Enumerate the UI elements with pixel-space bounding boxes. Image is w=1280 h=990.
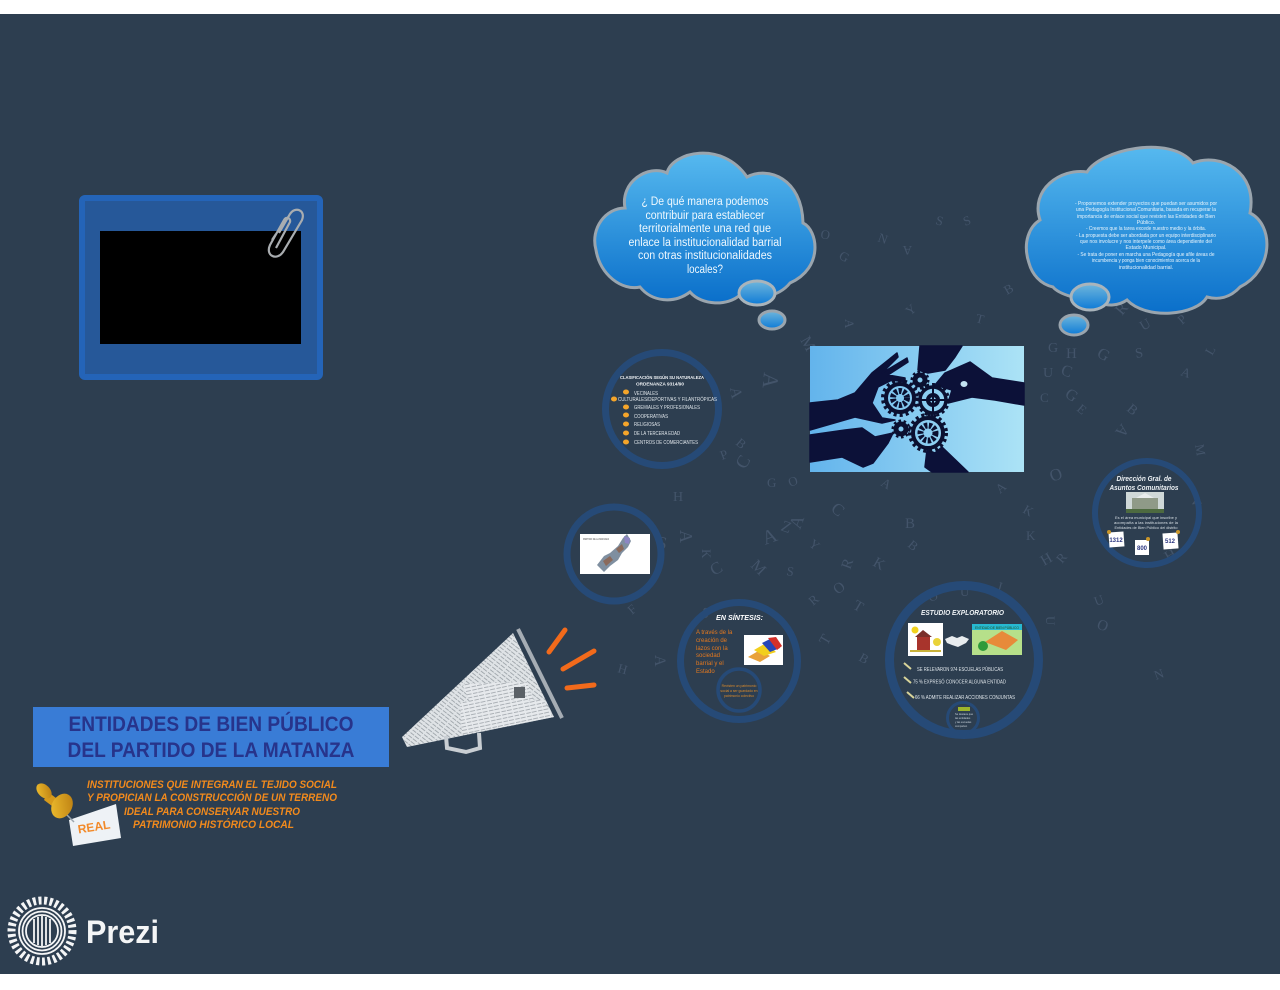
megaphone handle [446,733,480,752]
neighbourhood drawing [972,624,1022,655]
community text: acompaña a las instituciones de la [1114,521,1179,525]
question text: territorialmente una red que [639,223,771,235]
synthesis text: sociedad [696,653,720,659]
gear 3 [910,415,946,451]
gears [883,372,948,451]
scattered background letters: H [1066,346,1077,362]
thought bubble large [1071,284,1109,310]
synthesis text: Estado [696,669,715,675]
scattered background letters: B [856,650,872,667]
gear 5 [893,421,909,437]
classification list: VECINALES [634,391,659,397]
classification list: COOPERATIVAS [634,414,669,420]
logo mark [12,900,72,962]
inner circle [948,702,978,734]
tiny note text: comparten [955,724,968,728]
megaphone folded sheet [462,682,533,702]
subtitle: PATRIMONIO HISTÓRICO LOCAL [133,818,294,831]
scattered background letters: A [1179,364,1194,381]
prezi logo [12,900,159,962]
megaphone dark photo [514,687,525,698]
proposals text [1075,201,1217,271]
scattered background letters: O [926,588,940,605]
community text: Entidades de Bien Público del distrito [1114,526,1178,530]
scattered background letters: K [1020,502,1037,520]
synthesis text: A través de la [696,630,733,636]
scattered background letters: Y [902,300,920,318]
scattered background letters: U [1043,616,1058,626]
question text: con otras institucionalidades [638,250,772,262]
study findings: SE RELEVARON 974 ESCUELAS PÚBLICAS [917,666,1004,673]
megaphone lower sheet [460,700,554,735]
proposals text: - Se trata de poner en marcha una Pedagogía que afile áreas de [1078,252,1215,258]
proposals text: - La propuesta debe ser abordada por un equipo interdisciplinario [1076,233,1216,239]
scattered background letters: P [1174,311,1189,327]
neighbourhood drawing: ENTIDAD DE BIEN PÚBLICO [975,626,1019,630]
classification list: CENTROS DE COMERCIANTES [634,440,699,446]
scattered background letters: A [1111,420,1132,441]
scattered background letters: F [624,601,639,617]
map image [580,534,650,574]
scattered background letters: C [1040,390,1049,405]
scattered background letters: N [1152,665,1166,683]
scattered background letters: J [995,578,1004,594]
question text: contribuir para establecer [646,210,765,222]
tiny note text: las entidades [955,716,971,720]
community heading [1109,476,1179,492]
thought bubble large [739,281,775,305]
map caption: PARTIDO DE LA MATANZA [583,537,609,541]
proposals text: - Creemos que la tarea excede nuestro medio y la órbita. [1086,226,1206,232]
scattered background letters: R [1112,299,1132,319]
scattered background letters: R [839,556,857,571]
classification list: DE LA TERCERA EDAD [634,431,680,437]
scattered background letters: G [1094,345,1113,365]
proposals text: institucionalidad barrial. [1119,265,1173,271]
scattered background letters: R [1053,549,1070,566]
classification list: CULTURALES/DEPORTIVAS Y FILANTRÓPICAS [618,396,718,403]
gear 2 [918,384,948,416]
title text [68,712,354,762]
classification list: GREMIALES Y PROFESIONALES [634,405,701,411]
scattered background letters: A [676,530,696,543]
icon: newspaper megaphone [402,629,562,752]
cloud: proposals [1026,147,1267,335]
tiny note text [955,712,974,728]
note label: REAL [77,818,111,836]
scattered background letters: T [850,598,866,616]
scattered background letters: S [785,563,795,579]
study findings: 66 % ADMITE REALIZAR ACCIONES CONJUNTAS [915,695,1016,701]
finding markers [904,663,914,698]
question text: ¿ De qué manera podemos [642,196,769,208]
proposals text: - Proponemos extender proyectos que puedan ser asumidos por [1075,201,1217,207]
scattered background letters: K [870,555,888,574]
scattered background letters: M [797,334,818,354]
sound rays [549,630,594,688]
question text: enlace la institucionalidad barrial [628,237,782,249]
video placeholder [100,231,301,344]
scattered background letters: H [616,660,629,677]
title banner [33,707,389,767]
study findings: 75 % EXPRESÓ CONOCER ALGUNA ENTIDAD [913,678,1006,686]
study heading: ESTUDIO EXPLORATORIO [921,608,1004,617]
puzzle pieces [748,637,782,662]
circle: exploratory study [890,586,1038,734]
scattered background letters: P [718,446,730,463]
synthesis text: lazos con la [696,646,728,652]
scattered background letters: U [1043,366,1053,381]
panel: video frame [82,198,320,377]
small orange text: social a ser guardado en [720,689,758,693]
scattered background letters: E [1074,401,1090,417]
scattered background letters: B [905,516,915,532]
gear 4 [912,372,928,388]
scattered background letters: H [1038,550,1056,569]
scattered background letters: U [1092,591,1106,609]
synthesis text [696,630,733,675]
scattered background letters: B [1123,402,1140,419]
circle: synthesis [680,602,798,720]
synthesis text: barrial y el [696,661,724,667]
scattered background letters: A [785,512,808,531]
community text [1114,516,1179,530]
scattered background letters: M [1192,443,1209,457]
icon: paperclip [269,210,303,257]
hole in hand [960,381,968,387]
note pins [1107,530,1180,541]
scattered background letters: Y [806,536,823,554]
study findings [913,666,1016,701]
classification title: ORDENANZA 9314/90 [636,382,684,386]
community heading: Asuntos Comunitarios [1109,485,1179,492]
scattered background letters: A [842,319,857,329]
scattered background letters: S [1134,346,1144,362]
scattered background letters: A [758,372,784,390]
note 1312: 1312 [1109,538,1123,544]
scattered background letters: H [1162,546,1180,565]
scattered background letters: A [651,655,668,667]
scattered background letters: M [747,557,769,579]
title text: DEL PARTIDO DE LA MATANZA [68,739,354,762]
scattered background letters: T [817,632,835,648]
scattered background letters: O [786,473,800,490]
proposals text: Estado Municipal. [1126,245,1166,251]
scattered background letters: G [1062,385,1081,406]
classification title [620,373,705,386]
scattered background letters: R [805,591,822,608]
scattered background letters: N [876,230,891,247]
scattered background letters: K [1026,528,1036,543]
scattered background letters: O [1095,617,1110,636]
scattered background letters: S [934,212,945,229]
thought bubble small [1060,315,1088,335]
note: real with pin [33,780,121,846]
subtitle: IDEAL PARA CONSERVAR NUESTRO [124,806,300,818]
scattered background letters: A [902,243,912,258]
megaphone rim [518,629,562,718]
inner circle [718,669,760,711]
community text: Es el área municipal que inscribe y [1115,516,1177,520]
scattered background letters: O [830,579,849,598]
classification list: RELIGIOSAS [634,422,661,428]
subtitle: INSTITUCIONES QUE INTEGRAN EL TEJIDO SOCIAL [87,779,337,791]
scattered background letters: B [733,435,750,452]
scattered background letters: A [878,475,895,493]
classification title: CLASIFICACIÓN SEGÚN SU NATURALEZA [620,373,705,380]
small orange text [720,684,758,698]
proposals text: incumbencia y ponga bien conocimientos acerca de la [1092,258,1200,264]
question text: locales? [687,264,723,276]
small orange text: patrimonio colectivo [724,694,754,698]
scattered background letters: S [655,532,669,554]
scattered background letters: S [961,212,973,229]
green note [958,707,970,711]
scattered background letters: A [726,386,745,401]
note 512: 512 [1165,539,1176,545]
list bullets [611,390,629,444]
proposals text: una Pedagogía Institucional Comunitaria, basada en recuperar la [1076,207,1216,213]
logo wordmark: Prezi [86,914,159,950]
icon: handshake [945,636,969,647]
scattered background letters: A [992,478,1010,496]
scattered background letters: G [1048,341,1058,356]
scattered background letters: A [759,524,781,550]
scattered background letters: C [706,557,726,579]
subtitle [87,779,337,831]
scattered background letters: L [1202,343,1219,358]
megaphone body [402,633,554,747]
scattered background letters: S [699,605,712,623]
note paper [69,804,121,846]
circle: map [567,507,661,601]
note 800: 800 [1137,546,1148,552]
circle: community affairs [1095,461,1199,565]
hands silhouettes [810,346,1024,472]
image: hands and gears [810,346,1024,472]
scattered background letters: B [1001,280,1016,298]
scattered background letters: G [767,475,776,490]
scattered background letters: U [1138,316,1154,334]
small orange text: Revisten un patrimonio [722,684,756,688]
building photo [1126,492,1164,513]
scattered background letters: K [699,549,714,559]
circle: classification [606,352,718,466]
scattered background letters: O [819,226,831,243]
tiny note text: y las escuelas [955,720,972,724]
classification list [618,391,718,446]
proposals text: importancia de enlace social que revisten las Entidades de Bien [1077,214,1215,220]
map shape [597,534,631,572]
gear 1 [883,381,917,415]
cloud: question [595,153,815,329]
question text [628,196,782,276]
scattered background letters: V [1187,494,1205,510]
thought bubble small [759,311,785,329]
synthesis text: creación de [696,638,728,644]
scattered background letters: C [827,499,848,520]
scattered background letters: C [1059,362,1074,381]
scattered background letters: B [905,537,922,554]
subtitle: Y PROPICIAN LA CONSTRUCCIÓN DE UN TERRENO [87,791,337,804]
synthesis heading: EN SÍNTESIS: [716,613,763,622]
icon: pushpin [33,780,77,822]
tiny note text: Se destaca que [955,712,974,716]
title text: ENTIDADES DE BIEN PÚBLICO [68,712,354,736]
community heading: Dirección Gral. de [1116,476,1172,483]
scattered background letters: Z [779,518,794,537]
scattered background letters: G [836,248,852,265]
puzzle image [744,635,783,665]
proposals text: Público. [1137,220,1155,226]
scattered background letters: H [673,490,683,505]
proposals text: que nos involucre y nos interpele como área dependiente del [1080,239,1212,245]
school drawing [908,623,943,656]
scattered background letters: T [974,310,986,327]
scattered background letters: O [1047,464,1065,486]
scattered background letters: C [731,452,754,472]
scattered background letters: U [960,584,970,599]
scattered background letters [616,212,1219,683]
